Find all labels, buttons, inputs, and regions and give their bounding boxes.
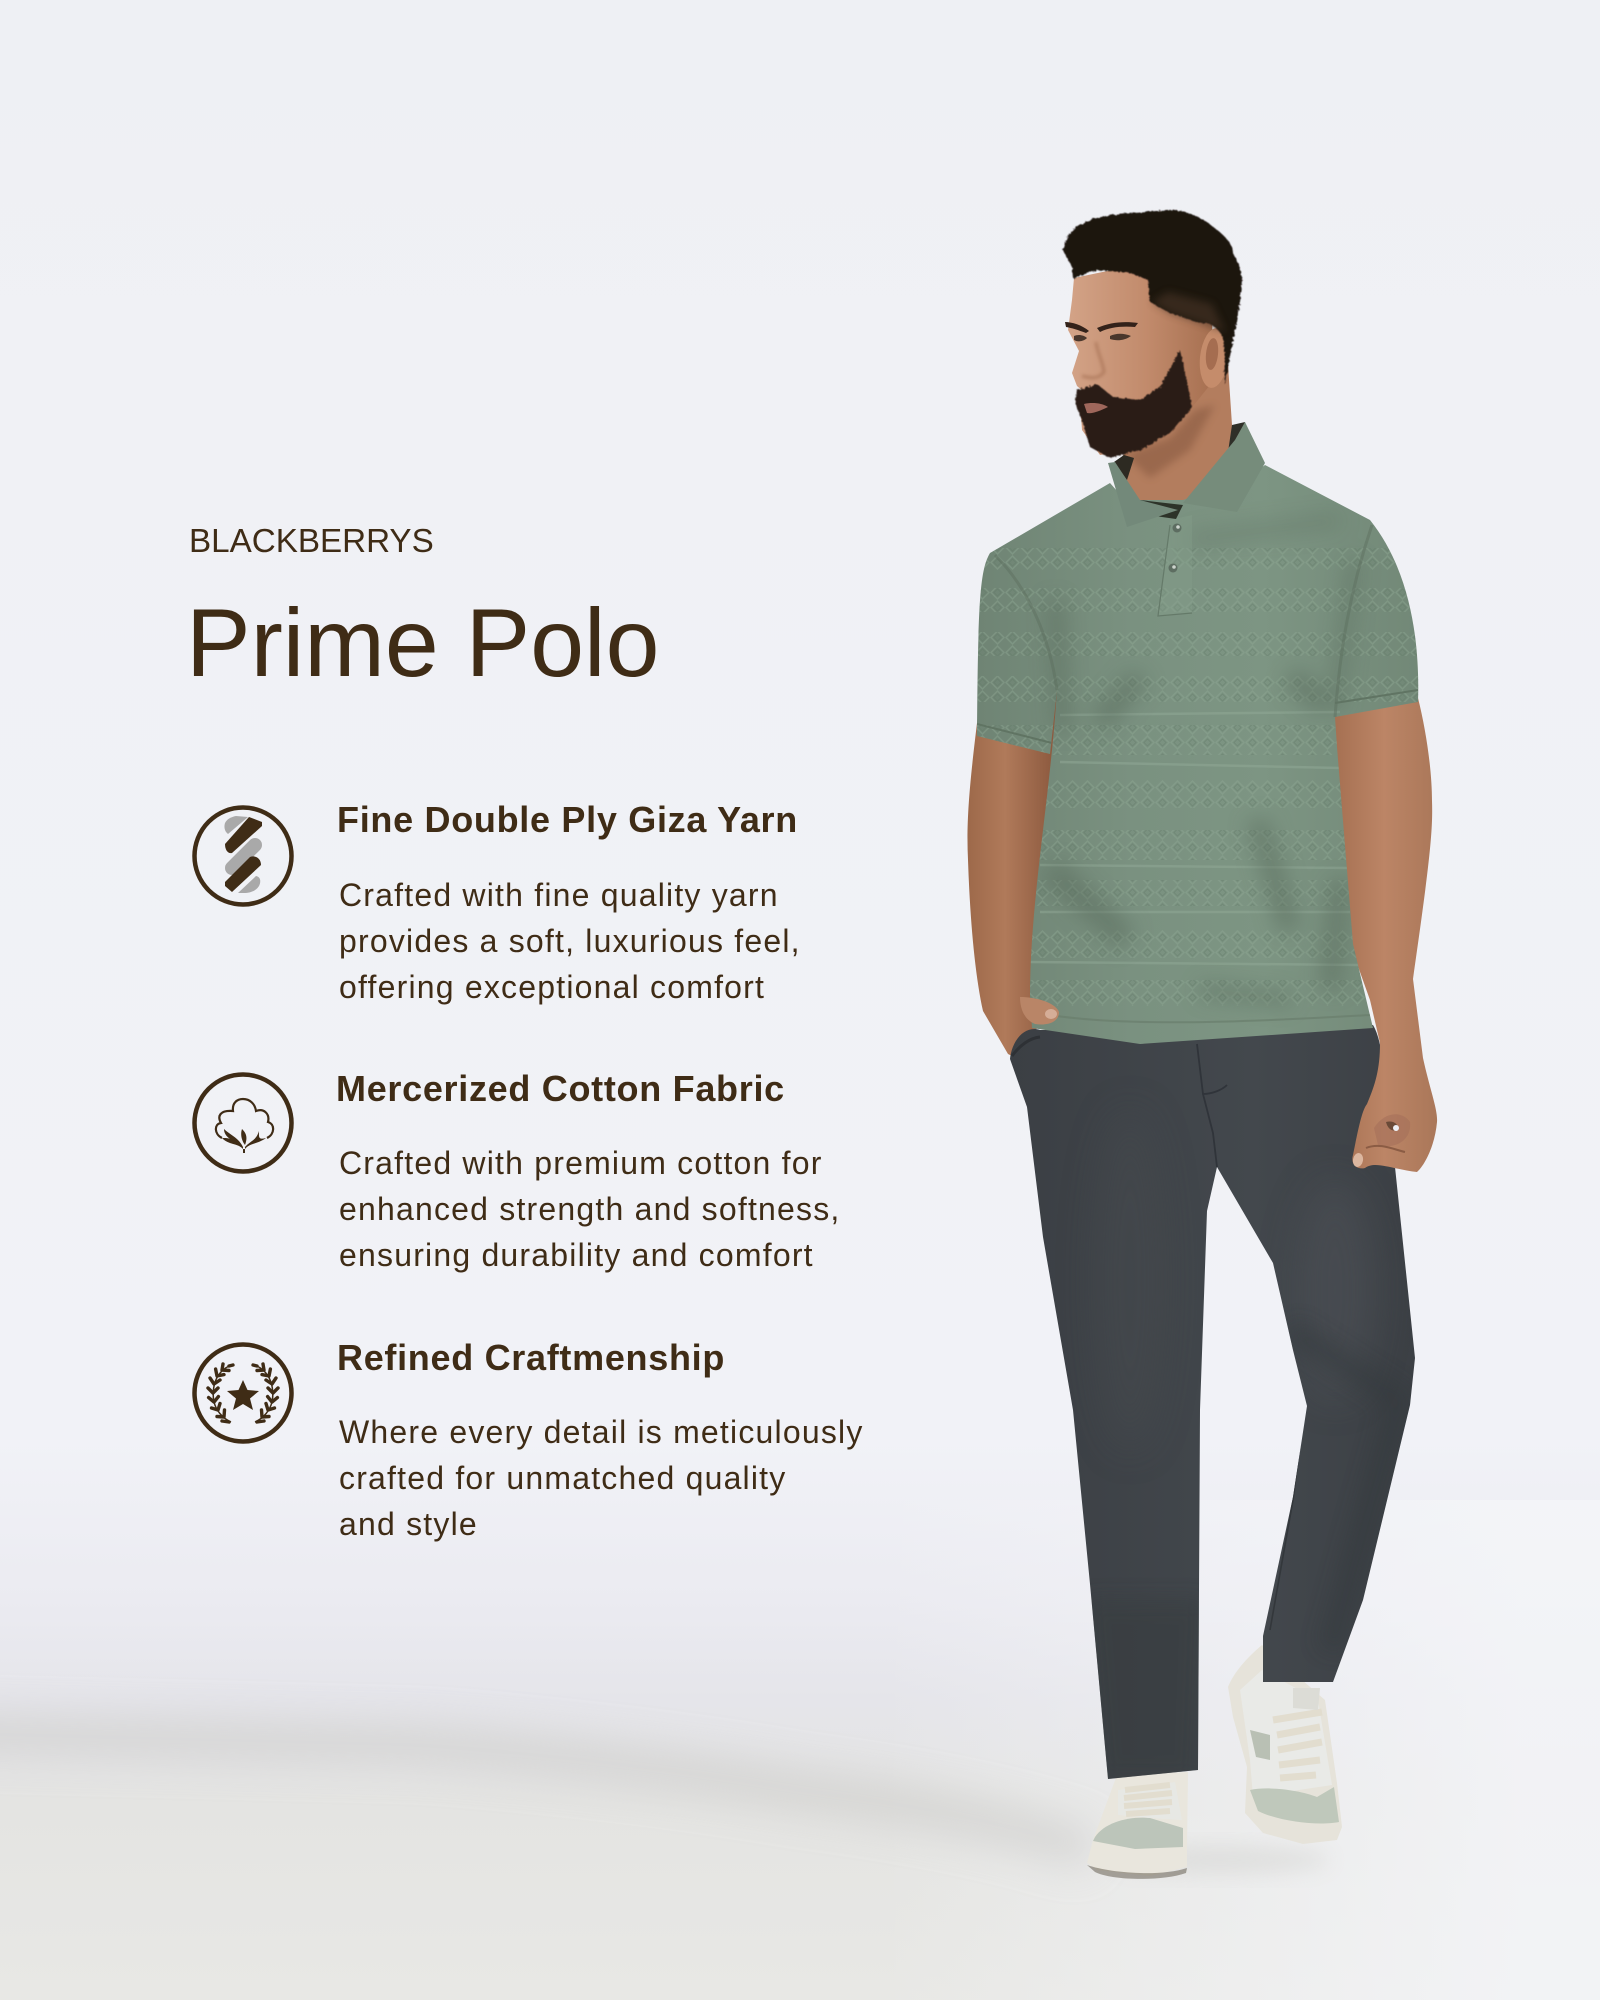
figure: male model in polo, trousers and sneakers [967, 208, 1438, 1879]
text: cotton description: ensuring durability and comfort [339, 1237, 814, 1273]
text: craftsmanship description: and style [339, 1506, 478, 1542]
dark collar interior [1114, 422, 1245, 519]
beard and moustache [1075, 350, 1192, 458]
text: yarn description [339, 877, 801, 1005]
icon: laurel and star [192, 1342, 294, 1444]
neck [1116, 365, 1242, 508]
brand name: BLACKBERRYS [189, 523, 434, 560]
ear [1197, 327, 1231, 389]
text: yarn description: provides a soft, luxurious feel, [339, 923, 801, 959]
icon: cotton boll [192, 1072, 294, 1174]
eyes, brows, nose [1065, 322, 1138, 378]
text: craftsmanship description: Where every detail is meticulously [339, 1414, 864, 1450]
title: Prime Polo [186, 588, 659, 697]
text: craftsmanship description [339, 1414, 864, 1542]
heading: cotton: Mercerized Cotton Fabric [336, 1068, 785, 1109]
left arm and hand [967, 670, 1075, 1060]
right arm and hand [1320, 698, 1437, 1172]
trousers [1010, 1025, 1415, 1780]
left thumb over hem [1020, 997, 1059, 1024]
heading: yarn: Fine Double Ply Giza Yarn [337, 799, 798, 840]
lips [1084, 403, 1108, 413]
text: yarn description: Crafted with fine quality yarn [339, 877, 779, 913]
text: craftsmanship description: crafted for unmatched quality [339, 1460, 786, 1496]
collar [1108, 422, 1265, 527]
floor shadow under shoes [1110, 1846, 1330, 1874]
icon: twisted yarn [192, 805, 294, 907]
placket and buttons [1158, 515, 1192, 616]
heading: craftsmanship: Refined Craftmenship [337, 1337, 725, 1378]
text: cotton description: enhanced strength and softness, [339, 1191, 841, 1227]
face [1068, 262, 1214, 455]
text: yarn description: offering exceptional comfort [339, 969, 765, 1005]
shirt knit pattern bands [960, 548, 1440, 1006]
right sneaker [1228, 1645, 1342, 1844]
hair [1063, 210, 1242, 385]
text: cotton description: Crafted with premium cotton for [339, 1145, 823, 1181]
polo shirt [960, 422, 1440, 1044]
text: cotton description [339, 1145, 841, 1273]
left sneaker [1087, 1772, 1188, 1879]
